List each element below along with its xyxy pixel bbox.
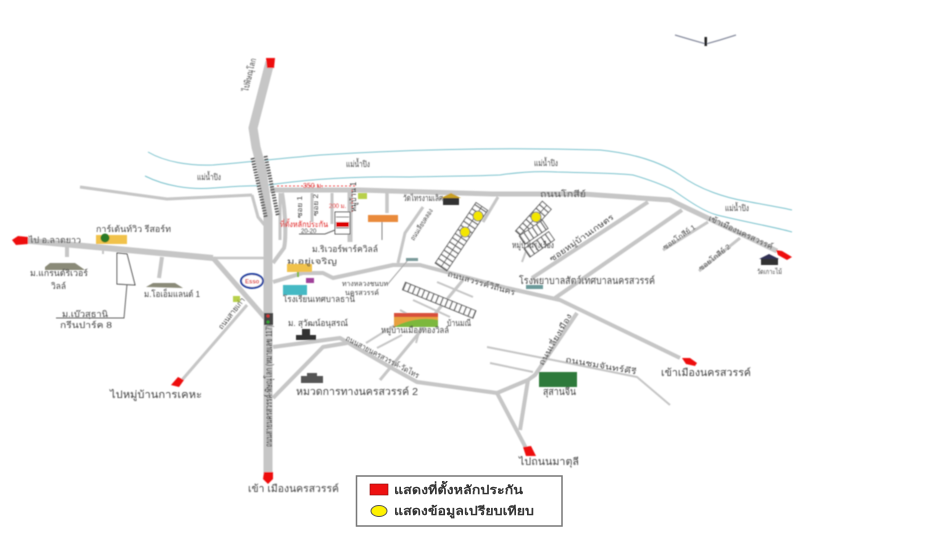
map labels: ม.แกรนด์ริเวอร์ xyxy=(30,268,88,278)
map labels: ไปถนนมาตุลี xyxy=(518,456,579,468)
road network xyxy=(20,62,777,474)
map labels: ถนนสายเก่า xyxy=(216,296,247,331)
map labels: ถนนเลี่ยงเมือง xyxy=(535,311,574,367)
subject plot: 20-20 xyxy=(301,229,317,235)
map labels: หมู่บ้าน 1 xyxy=(349,181,359,212)
map labels: แม่น้ำปิง xyxy=(197,171,221,182)
highway xyxy=(253,62,270,474)
map labels: สุสานจีน xyxy=(543,386,576,398)
map labels: ม.ริเวอร์พาร์ควิลล์ xyxy=(312,244,378,254)
subject plot xyxy=(277,183,355,235)
map labels: หมู่บ้านรุ่งเรือง xyxy=(512,240,554,251)
legend: collateral location: แสดงที่ตั้งหลักประกัน xyxy=(394,480,524,497)
map labels: แม่น้ำปิง xyxy=(725,202,749,213)
map labels: ม.เบ๊วสุธานิ xyxy=(62,309,108,320)
map labels: ซอย 1 xyxy=(297,196,304,218)
map labels: วัดเกาะไม้ xyxy=(757,267,782,276)
river: Ping xyxy=(145,149,792,232)
map labels: ถนนสายนครสวรรค์-พิษณุโลก (หมายเลข 117) xyxy=(263,325,275,447)
map labels: ไปพิษณุโลก xyxy=(240,57,259,93)
map labels: ซอยโกสีย์ 1 xyxy=(661,222,697,252)
map labels: เข้าเมืองนครสวรรค์ xyxy=(661,367,751,379)
map labels: หมวดการทางนครสวรรค์ 2 xyxy=(296,386,418,398)
map labels: โรงเรียนเทศบาลธานี xyxy=(283,294,355,304)
housing parcels xyxy=(403,201,554,318)
map labels: วิลล์ xyxy=(51,281,66,291)
map labels: การ์เด้นท์วิว รีสอร์ท xyxy=(96,224,171,234)
map labels: ไป อ.ลาดยาว xyxy=(28,235,81,245)
map labels: เข้า เมืองนครสวรรค์ xyxy=(248,483,339,495)
map labels: แม่น้ำปิง xyxy=(534,157,558,168)
map labels: ม. สุวัฒน์อนุสรณ์ xyxy=(288,318,348,329)
map labels: นครสวรรค์ xyxy=(345,289,379,297)
map labels: บ้านมณี xyxy=(447,318,471,328)
airplane north marker xyxy=(675,35,736,46)
legend: comparison data xyxy=(371,504,534,519)
yellow comparison markers xyxy=(460,211,541,237)
subject plot: 200 ม. xyxy=(329,204,347,210)
map labels: ถนนเลียบคลอง xyxy=(409,207,435,242)
map labels: ซอยโกสีย์ 2 xyxy=(697,242,732,273)
subject plot: 350 ม. xyxy=(303,183,323,190)
subject plot: ที่ตั้งหลักประกัน xyxy=(280,218,328,229)
map labels: ซอยหมู่บ้านเกษตร xyxy=(548,212,617,264)
map labels: ถนนโกสีย์ xyxy=(540,189,586,199)
map labels xyxy=(28,57,782,495)
map labels: เข้าเมืองนครสวรรค์ xyxy=(707,213,775,251)
legend: collateral location xyxy=(370,480,524,497)
map labels: แม่น้ำปิง xyxy=(346,158,370,169)
map labels: ถนนสวรรค์วิถีนคร xyxy=(446,268,517,297)
red direction arrows xyxy=(12,58,792,484)
landmark icons: Esso xyxy=(245,280,260,286)
map labels: ซอย 2 xyxy=(313,194,320,216)
map labels: ม.อยู่เจริญ xyxy=(287,257,337,267)
map labels: ไปหมู่บ้านการเคหะ xyxy=(109,389,202,401)
legend: comparison data: แสดงข้อมูลเปรียบเทียบ xyxy=(394,504,534,519)
map labels: หมู่บ้านเมืองทองวิลล์ xyxy=(381,325,449,336)
map labels: กรีนปาร์ค 8 xyxy=(60,320,112,330)
map labels: ถนนชมจันทร์คีรี xyxy=(565,354,638,377)
plot near highway xyxy=(56,253,135,318)
map labels: ทางหลวงชนบท xyxy=(342,281,388,288)
map labels: โรงพยาบาลสัตว์เทศบาลนครสวรรค์ xyxy=(519,274,655,287)
legend xyxy=(356,476,562,526)
bridge xyxy=(252,156,278,218)
map labels: ม.โอเอ็มแลนด์ 1 xyxy=(144,288,200,299)
landmark icons xyxy=(45,193,779,387)
map labels: วัดไทรงามเลิศ xyxy=(403,193,443,203)
map labels: ถนนสายนครสวรรค์-วัดไทร xyxy=(344,333,422,381)
